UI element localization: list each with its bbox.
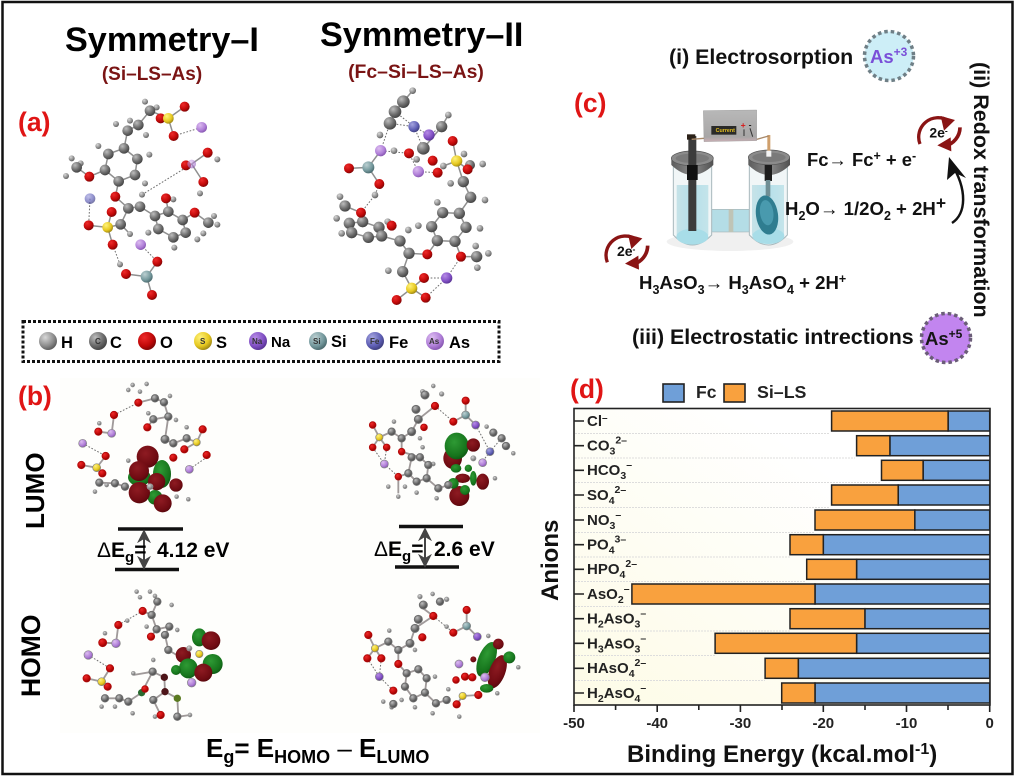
category labels: HAsO	[587, 660, 629, 677]
redox cycle icon: bottom left	[606, 234, 648, 270]
reaction: Fc oxidation: Fc→ Fc	[807, 149, 873, 170]
category labels: 3	[635, 644, 641, 656]
reaction: water oxidation: 2	[884, 209, 891, 223]
energy gap: Symmetry-I: ΔE	[97, 539, 125, 562]
legend: atom key	[23, 322, 499, 362]
category labels: NO	[587, 512, 610, 529]
x-axis tick labels: -10	[896, 715, 917, 732]
legend: atom key: As	[429, 337, 440, 346]
category labels: SO	[587, 487, 609, 504]
molecule: Symmetry-II	[333, 87, 492, 305]
x-axis tick labels: 0	[986, 715, 994, 732]
heading: Symmetry-II: Symmetry–II	[320, 16, 523, 54]
panel: d binding energy chart	[537, 374, 994, 768]
orbital: HOMO Symmetry-II	[364, 592, 520, 719]
category labels: PO	[587, 536, 609, 554]
category labels: 4	[609, 544, 615, 556]
category labels: AsO	[587, 586, 618, 603]
x-axis tick labels: -50	[563, 715, 585, 732]
axis title: Binding Energy: Binding Energy (kcal.mol	[627, 741, 915, 768]
panel: b frontier orbitals	[16, 378, 540, 767]
legend: atom key: Fe	[389, 334, 408, 352]
right vial	[748, 135, 790, 245]
category labels: –	[615, 509, 621, 521]
label (c): (c)	[574, 88, 606, 118]
electrochemical cell	[667, 110, 793, 251]
x-axis tick labels: -30	[730, 715, 751, 732]
equation: band gap: HOMO	[274, 747, 330, 767]
equation: band gap: g	[223, 747, 234, 767]
energy gap: Symmetry-I: =	[134, 539, 146, 562]
reaction: Fc oxidation: +	[873, 149, 881, 163]
x-axis tick labels: -40	[646, 715, 668, 732]
legend: atom key: Si	[313, 337, 321, 346]
category labels: 2–	[635, 657, 646, 669]
category labels: 3	[610, 446, 616, 458]
category labels: 3	[598, 644, 604, 656]
equation: band gap: –	[330, 733, 359, 763]
category labels: 4	[629, 668, 635, 680]
category labels: 3	[620, 470, 626, 482]
category labels: 2–	[615, 484, 626, 496]
chart legend: Fc	[696, 382, 717, 402]
left vial	[671, 134, 713, 245]
label (b): (b)	[18, 381, 52, 411]
legend: atom key: H	[61, 334, 73, 352]
panel: c mechanism	[574, 32, 993, 362]
wires	[692, 136, 769, 139]
heading: electrosorption: (i) Electrosorption	[669, 45, 853, 69]
energy gap: Symmetry-I: 4.12 eV	[157, 539, 229, 562]
category labels: Cl	[587, 413, 602, 430]
category labels: 3	[610, 520, 616, 532]
label LUMO: LUMO	[20, 452, 50, 529]
badge: As+5: As	[925, 328, 949, 349]
category labels: 4	[609, 495, 615, 507]
legend: atom key: Fe	[370, 337, 380, 346]
reaction: water oxidation: + 2H	[891, 198, 936, 219]
arrow: curved up	[947, 157, 966, 223]
badge: As+3: As	[870, 46, 894, 67]
category labels: 2	[618, 594, 624, 606]
reaction: arsenite oxidation: 3	[698, 283, 705, 297]
category labels: 2	[598, 693, 604, 705]
orbital: LUMO Symmetry-II	[369, 384, 515, 506]
panel: a molecular structures	[18, 16, 523, 305]
reaction: arsenite oxidation: H	[639, 272, 652, 293]
category labels: 4	[620, 569, 626, 581]
energy gap: Symmetry-II: 2.6 eV	[434, 538, 495, 561]
reaction: water oxidation: O→ 1/2O	[805, 198, 884, 219]
energy gap: Symmetry-I	[97, 529, 229, 570]
redox cycle icon: bottom left: 2e	[617, 243, 633, 259]
badge: As+5	[922, 314, 970, 362]
category labels: 2	[598, 618, 604, 630]
energy gap: Symmetry-II: g	[402, 548, 411, 565]
legend: atom key: S	[200, 337, 206, 346]
category labels: H	[587, 610, 598, 628]
axis title: Binding Energy: )	[929, 741, 937, 768]
energy gap: Symmetry-II	[374, 526, 495, 567]
axis title: Binding Energy: -1	[915, 741, 929, 758]
reaction: arsenite oxidation: 3	[652, 283, 659, 297]
power supply	[703, 110, 757, 142]
bar chart	[563, 408, 994, 732]
category labels: HPO	[587, 561, 620, 578]
legend: atom key: O	[160, 334, 173, 352]
badge: As+3: +3	[894, 45, 908, 59]
category labels: CO	[587, 438, 610, 454]
orbital: HOMO Symmetry-I	[83, 590, 223, 720]
badge: As+3	[864, 32, 914, 80]
power supply: +	[741, 120, 746, 130]
energy gap: Symmetry-II: ΔE	[374, 538, 402, 561]
redox cycle icon: top right: 2e	[929, 125, 945, 141]
category labels	[587, 413, 646, 705]
reaction: arsenite oxidation: + 2H	[794, 272, 839, 293]
axis title: Anions: Anions	[537, 520, 564, 601]
redox cycle icon: bottom left: -	[633, 244, 636, 254]
legend: atom key: C	[95, 337, 101, 346]
chart legend: Si–LS	[757, 382, 807, 402]
label (d): (d)	[570, 374, 604, 404]
reaction: arsenite oxidation: 3	[742, 283, 749, 297]
reaction: arsenite oxidation: AsO	[749, 272, 787, 293]
reaction: water oxidation: H	[785, 198, 798, 219]
category labels: –	[640, 682, 646, 694]
reaction: arsenite oxidation: → H	[705, 272, 742, 293]
badge: As+5: +5	[949, 327, 963, 341]
category labels: –	[640, 632, 646, 644]
energy gap: Symmetry-I: g	[125, 549, 134, 566]
reaction: arsenite oxidation: 4	[787, 283, 794, 297]
x-axis tick labels: -20	[812, 715, 834, 732]
category labels: HCO	[587, 462, 620, 479]
reaction: water oxidation: +	[936, 193, 946, 213]
salt bridge	[710, 209, 752, 232]
legend: atom key: As	[449, 334, 470, 352]
legend: atom key: S	[216, 334, 227, 352]
category labels: AsO	[604, 685, 635, 702]
category labels: –	[626, 459, 632, 471]
subheading: Si-LS-As: (Si–LS–As)	[102, 64, 202, 85]
category labels: 2–	[615, 434, 627, 446]
category labels: 3–	[615, 534, 626, 546]
category labels: AsO	[604, 610, 635, 628]
label (a): (a)	[18, 107, 50, 137]
reaction: water oxidation: 2	[798, 209, 805, 223]
category labels: –	[602, 413, 608, 424]
legend: atom key: Na	[271, 334, 291, 351]
reaction: arsenite oxidation: +	[839, 272, 846, 286]
orbital: LUMO Symmetry-I	[78, 382, 210, 512]
x-axis tick labels	[563, 715, 994, 732]
category labels: H	[587, 685, 598, 702]
category labels: –	[624, 583, 630, 595]
power supply: Current	[716, 128, 735, 134]
energy gap: Symmetry-II: =	[411, 538, 423, 561]
category labels: H	[587, 636, 598, 652]
category labels: 4	[635, 693, 641, 705]
heading: electrostatic interactions: (iii) Electrostatic intrections	[632, 325, 914, 349]
equation: band gap: E	[359, 733, 376, 763]
heading: Symmetry-I: Symmetry–I	[65, 21, 259, 59]
label HOMO: HOMO	[16, 615, 46, 697]
equation: band gap: = E	[234, 733, 274, 763]
category labels: 2–	[625, 558, 637, 570]
legend: atom key: Si	[331, 333, 347, 351]
redox cycle icon: top right	[919, 116, 960, 151]
legend: atom key: C	[110, 334, 122, 352]
heading: redox transformation: (ii) Redox transformation	[969, 62, 993, 318]
category labels: AsO	[604, 636, 635, 652]
reaction: arsenite oxidation: AsO	[659, 272, 698, 293]
category labels: –	[640, 608, 646, 620]
legend: atom key: Na	[252, 337, 263, 346]
power supply: -	[749, 119, 752, 129]
chart legend	[663, 382, 807, 402]
category labels: 3	[635, 618, 641, 630]
subheading: Fc-Si-LS-As: (Fc–Si–LS–As)	[348, 61, 484, 83]
reaction: Fc oxidation: + e	[881, 149, 912, 170]
reaction: Fc oxidation: -	[912, 149, 916, 163]
equation: band gap: LUMO	[376, 747, 429, 767]
equation: band gap: E	[206, 733, 223, 763]
redox cycle icon: top right: -	[945, 126, 948, 136]
molecule: Symmetry-I	[63, 99, 220, 300]
